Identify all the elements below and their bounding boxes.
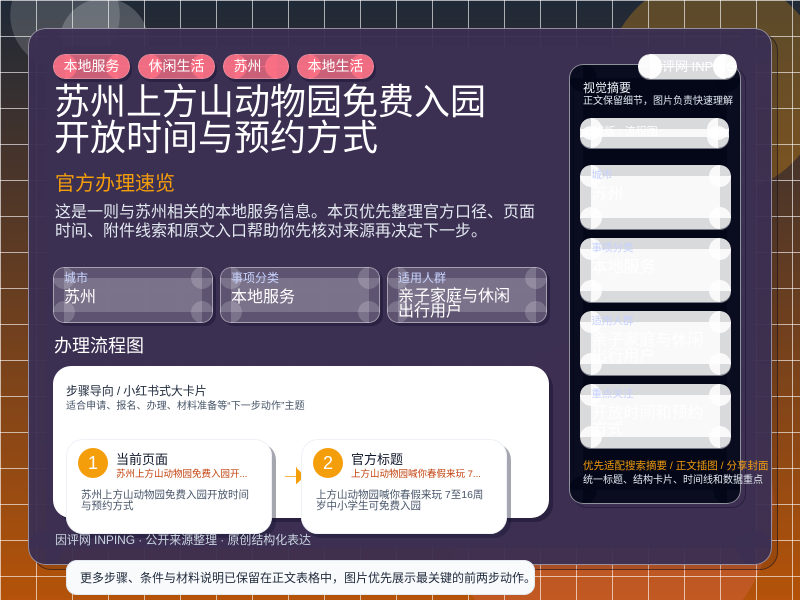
step description: 上方山动物园喊你春假来玩 7至16周 — [316, 489, 483, 501]
step 1 card — [66, 439, 272, 534]
label: 事项分类 — [592, 242, 634, 254]
tag: 本地生活 — [297, 54, 374, 79]
subtitle: 官方办理速览 — [55, 173, 175, 195]
value: 苏州 — [592, 186, 624, 203]
label: 适用人群 — [398, 271, 446, 285]
title — [54, 81, 486, 158]
value: 本地服务 — [592, 259, 656, 276]
flow card — [53, 366, 549, 518]
step description — [316, 489, 483, 512]
title: 开放时间与预约方式 — [54, 117, 378, 158]
tag: 本地服务: 本地服务 — [64, 58, 120, 74]
value: 亲子家庭与休闲 — [592, 332, 704, 349]
arrow — [285, 467, 301, 484]
step description: 苏州上方山动物园免费入园开放时间 — [81, 489, 249, 501]
info card: 事项分类 — [220, 267, 380, 323]
value: 方式 — [592, 421, 624, 438]
value: 开放时间和预约 — [592, 405, 704, 422]
brand pill — [638, 54, 737, 79]
flow card title: 步骤导向 / 小红书式大卡片 — [66, 384, 207, 398]
step number — [78, 448, 108, 478]
flow heading: 办理流程图 — [54, 336, 144, 356]
tag: 本地服务 — [53, 54, 130, 79]
side note amber: 优先适配搜索摘要 / 正文插图 / 分享封面 — [583, 460, 769, 472]
step description — [81, 489, 249, 512]
value: 苏州 — [64, 289, 96, 306]
tag: 苏州 — [223, 54, 289, 79]
summary text: 时间、附件线索和原文入口帮助你先核对来源再决定下一步。 — [55, 222, 487, 240]
template text: 模版 : 流程图 — [594, 126, 658, 138]
flow card subtitle: 适合申请、报名、办理、材料准备等“下一步动作”主题 — [66, 401, 305, 412]
step description: 岁中小学生可免费入园 — [316, 500, 421, 512]
tag: 休闲生活: 休闲生活 — [148, 58, 204, 74]
step source: 上方山动物园喊你春假来玩 7... — [351, 469, 481, 480]
value — [592, 333, 704, 365]
panel: visual summary — [568, 64, 741, 504]
step number — [313, 448, 343, 478]
label: 重点关注 — [592, 388, 634, 400]
value: 出行用户 — [592, 348, 656, 365]
side card: 城市 — [580, 165, 730, 228]
footer source line: 因评网 INPING · 公开来源整理 · 原创结构化表达 — [55, 533, 311, 547]
step 2 card — [301, 439, 507, 534]
info card: 适用人群 — [387, 267, 547, 323]
label: 事项分类 — [231, 271, 279, 285]
summary text: 这是一则与苏州相关的本地服务信息。本页优先整理官方口径、页面 — [55, 204, 535, 221]
step title: 官方标题 — [351, 452, 403, 467]
side card: 重点关注 — [580, 384, 730, 448]
step description: 与预约方式 — [81, 500, 134, 512]
step title: 当前页面 — [116, 452, 168, 467]
value — [592, 406, 704, 438]
summary subheading: 正文保留细节，图片负责快速理解 — [583, 96, 733, 107]
step source: 苏州上方山动物园免费入园开... — [116, 469, 247, 480]
tag: 本地生活: 本地生活 — [308, 58, 364, 74]
side card: 适用人群 — [580, 311, 730, 374]
value: 本地服务 — [231, 289, 295, 306]
tag: 休闲生活 — [138, 54, 215, 79]
side panel shadow — [573, 68, 746, 508]
label: 城市 — [64, 271, 88, 285]
footnote text: 更多步骤、条件与材料说明已保留在正文表格中，图片优先展示最关键的前两步动作。 — [80, 571, 536, 585]
value: 亲子家庭与休闲 — [398, 288, 510, 305]
summary text — [55, 203, 535, 240]
template row — [580, 118, 729, 148]
summary heading: 视觉摘要 — [583, 81, 631, 95]
label: 城市 — [592, 169, 612, 181]
title: 苏州上方山动物园免费入园 — [54, 81, 486, 122]
brand pill: 因评网 INPING — [649, 59, 736, 74]
value: 出行用户 — [398, 303, 462, 320]
value — [398, 287, 510, 320]
tag: 苏州: 苏州 — [234, 58, 262, 74]
side note: 统一标题、结构卡片、时间线和数据重点 — [583, 475, 763, 486]
step number: 2 — [323, 453, 333, 473]
side card: 事项分类 — [580, 238, 730, 302]
footnote callout — [66, 560, 535, 595]
step number: 1 — [88, 453, 98, 473]
label: 适用人群 — [592, 315, 634, 327]
info card: 城市 — [53, 267, 213, 323]
